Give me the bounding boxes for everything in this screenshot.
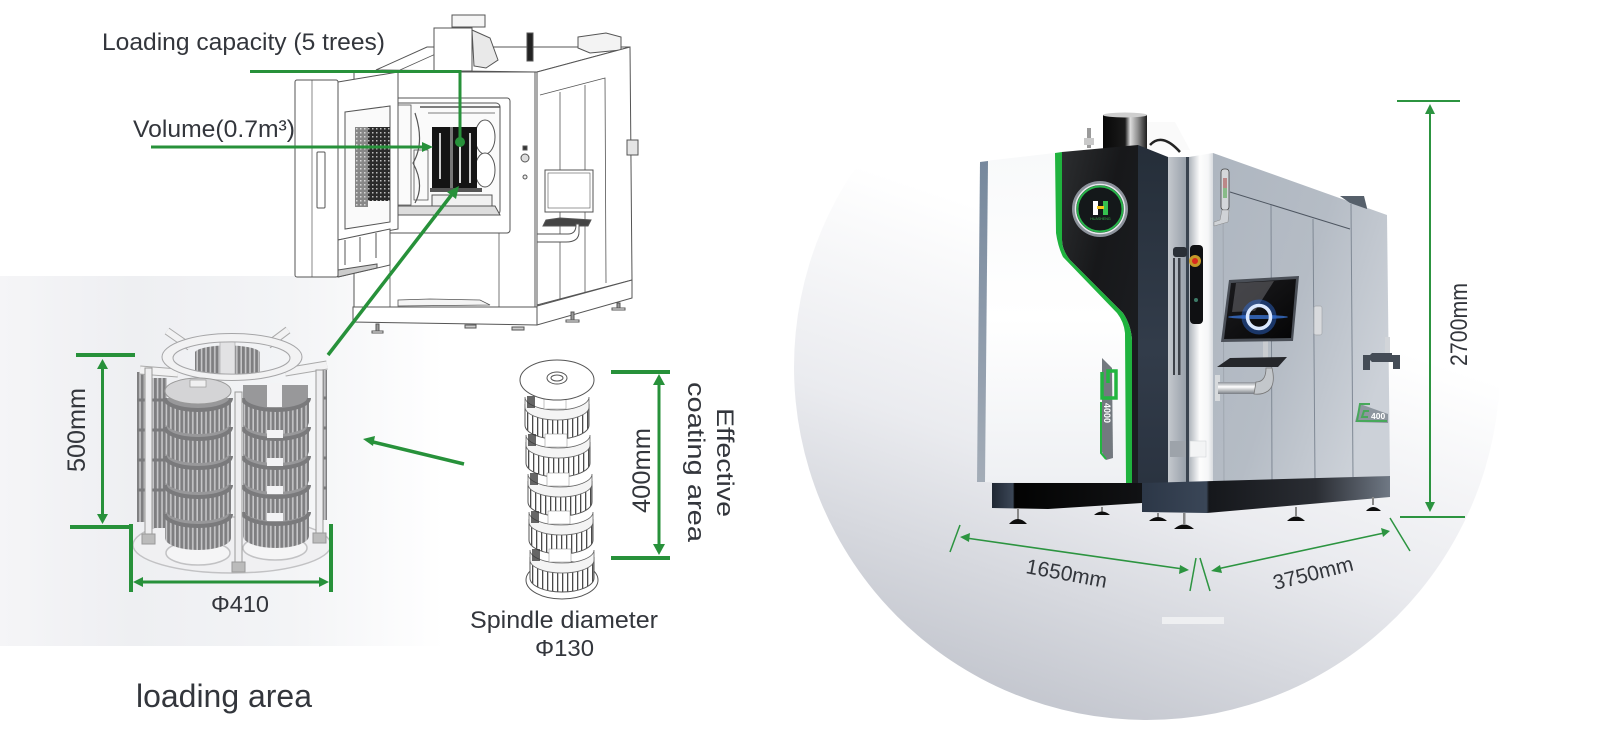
dark seam bbox=[1186, 157, 1189, 483]
spindle top disc bbox=[520, 360, 594, 400]
white door strip bbox=[1189, 153, 1213, 483]
label: 2700mm: 2700mm bbox=[1446, 283, 1473, 366]
wall sockets bbox=[1170, 441, 1206, 457]
side G4 badge bbox=[1355, 404, 1388, 423]
side panel seams bbox=[1223, 190, 1353, 482]
machine base and feet bbox=[353, 303, 625, 333]
line drawing: open coating machine bbox=[295, 15, 638, 333]
top ring and spokes bbox=[140, 330, 327, 381]
label: coating area: coating area bbox=[682, 382, 709, 543]
machine monitor and keyboard bbox=[537, 170, 593, 242]
back trees bbox=[137, 341, 327, 528]
dimension: 1650mm width bbox=[950, 525, 1196, 591]
dimension: 3750mm depth bbox=[1200, 518, 1410, 591]
machine render bbox=[977, 112, 1400, 529]
label: 400mm: 400mm bbox=[628, 428, 656, 513]
levelling feet bbox=[1009, 497, 1381, 529]
door outer slab bbox=[295, 80, 338, 277]
five loading trees bbox=[430, 127, 482, 192]
label: effective: Effective bbox=[711, 408, 738, 517]
label: 500mm: 500mm bbox=[63, 388, 91, 472]
gray strip bbox=[1168, 157, 1186, 483]
machine lower cabinet bbox=[390, 233, 499, 307]
monitor bbox=[1221, 276, 1299, 342]
right tree bbox=[243, 383, 309, 548]
machine right side bbox=[537, 47, 638, 325]
dimension: 2700mm height bbox=[1397, 100, 1465, 518]
green logo circle bbox=[1072, 181, 1128, 237]
background circle behind machine bbox=[794, 14, 1500, 720]
callout arrow: tree cluster to chamber bbox=[328, 186, 459, 355]
keyboard bbox=[1217, 357, 1287, 367]
loading tree cluster bbox=[133, 330, 331, 573]
chamber interior bbox=[392, 103, 500, 215]
label: spindle diameter: Spindle diameter bbox=[470, 607, 658, 634]
label: phi 130: Φ130 bbox=[535, 635, 594, 661]
control knobs bbox=[521, 146, 529, 179]
chimney and top fittings bbox=[1084, 112, 1190, 152]
callout line: loading capacity bbox=[250, 72, 465, 147]
dimension: 400mm spindle bbox=[611, 370, 670, 560]
right base block bbox=[1142, 476, 1390, 513]
machine top pipework bbox=[376, 15, 630, 72]
label: volume: Volume(0.7m³) bbox=[133, 116, 295, 143]
dimension: 500mm height bbox=[70, 353, 135, 529]
monitor glow ring bbox=[1228, 302, 1288, 332]
chamber door opening bbox=[383, 98, 510, 233]
long door handle bbox=[1173, 258, 1180, 375]
H logo mark: HUASHENG bbox=[1090, 217, 1111, 221]
monitor arm and pipe bbox=[1215, 340, 1273, 401]
emergency stop control box bbox=[1173, 245, 1203, 324]
vent box on roof bbox=[1340, 196, 1367, 209]
label: phi 410: Φ410 bbox=[211, 591, 269, 617]
dimension: diameter 410 bbox=[129, 524, 333, 592]
machine front body bbox=[354, 72, 535, 307]
side bracket bbox=[1363, 337, 1400, 370]
side G4 badge: 400 bbox=[1371, 411, 1385, 421]
background panel: loading area bbox=[0, 276, 445, 646]
black curved panel bbox=[1062, 145, 1138, 483]
spindle base disc bbox=[526, 561, 598, 599]
label: loading capacity: Loading capacity (5 trees) bbox=[102, 29, 385, 56]
pale reflection patch bbox=[1162, 617, 1224, 624]
single spindle tree bbox=[520, 360, 598, 599]
support posts bbox=[142, 368, 326, 572]
label: 3750mm: 3750mm bbox=[1271, 553, 1356, 595]
callout arrow: volume bbox=[151, 142, 433, 152]
green curved stripe bbox=[1055, 152, 1132, 483]
dark blue column bbox=[1138, 145, 1168, 483]
left base block bbox=[992, 483, 1142, 509]
door handle on side panel bbox=[1314, 306, 1322, 335]
left tree bbox=[165, 378, 231, 550]
label: loading area: loading area bbox=[136, 678, 312, 714]
arrow: spindle to cluster bbox=[363, 436, 464, 464]
open left door bbox=[338, 72, 398, 277]
base plate bbox=[133, 517, 331, 573]
signal tower light bbox=[1214, 169, 1229, 226]
spindle tiers bbox=[525, 396, 594, 592]
label: 1650mm: 1650mm bbox=[1024, 555, 1109, 593]
vertical G4 badge bbox=[1101, 358, 1116, 460]
white front panel bbox=[977, 153, 1127, 483]
vertical G4 badge: 4000 bbox=[1102, 403, 1112, 423]
right side panel bbox=[1213, 153, 1390, 483]
left edge strip bbox=[977, 161, 988, 482]
